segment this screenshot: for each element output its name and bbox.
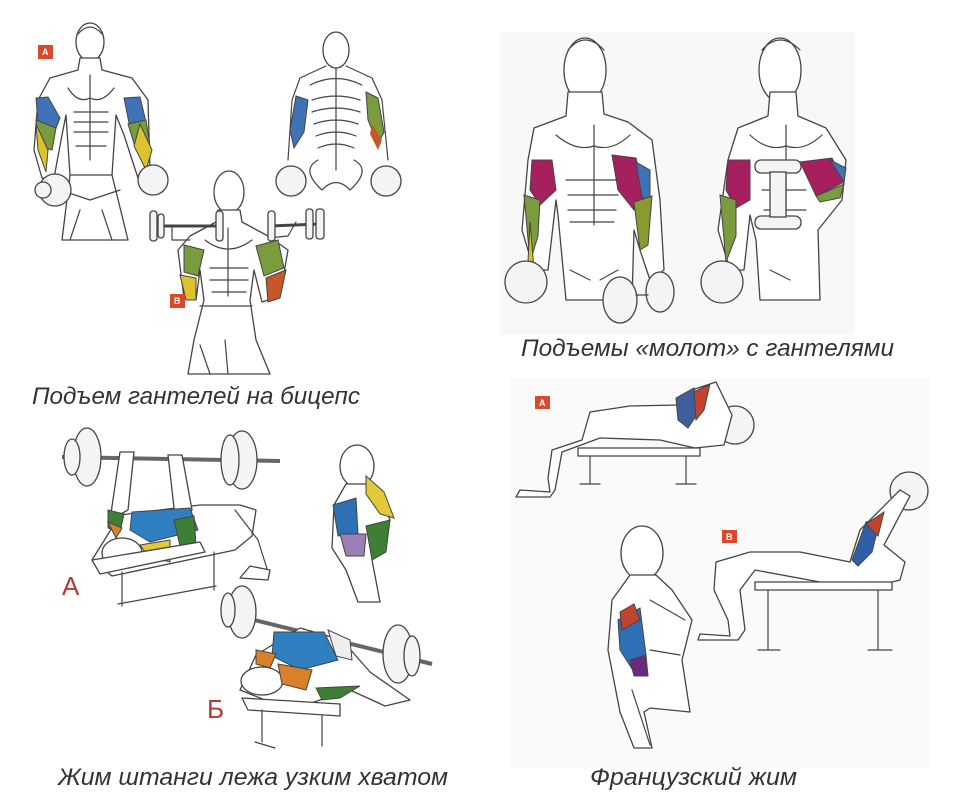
figure: right bbox=[701, 38, 846, 303]
dumbbell bbox=[603, 272, 674, 323]
label: B tag bbox=[170, 294, 185, 308]
caption: French press: Французский жим bbox=[590, 764, 797, 791]
figure: lying press A bbox=[92, 452, 270, 606]
barbell top bbox=[62, 428, 280, 489]
figure: curling dumbbells bbox=[150, 171, 324, 374]
panel: close-grip bench press bbox=[62, 428, 432, 748]
caption: hammer curls: Подъемы «молот» с гантелями bbox=[521, 335, 894, 362]
figure: lying A bbox=[516, 382, 754, 497]
caption: dumbbell curl: Подъем гантелей на бицепс bbox=[32, 383, 360, 410]
label: B tag bbox=[722, 530, 737, 543]
panel: dumbbell biceps curl bbox=[34, 23, 401, 374]
figure: lying press B bbox=[240, 628, 410, 748]
figure: lying B bbox=[698, 472, 928, 650]
left dumbbell bbox=[150, 211, 223, 241]
panel: French press bbox=[516, 382, 928, 748]
right dumbbell bbox=[268, 209, 324, 241]
panel: hammer curls background bbox=[500, 32, 855, 335]
figure: skeleton bbox=[276, 32, 401, 196]
figure: front standing bbox=[34, 23, 168, 240]
label: B tag: B bbox=[726, 532, 733, 542]
caption: bench press: Жим штанги лежа узким хватом bbox=[57, 764, 448, 791]
panel: hammer curls bbox=[505, 38, 846, 323]
label: B: Б bbox=[207, 694, 224, 724]
label: A tag: A bbox=[42, 47, 49, 57]
panel: French press background bbox=[510, 378, 930, 768]
dumbbell bbox=[755, 160, 801, 229]
label: B tag: B bbox=[174, 296, 181, 306]
label: A tag bbox=[535, 396, 550, 409]
label: A tag bbox=[38, 45, 53, 59]
label: A tag: A bbox=[539, 398, 546, 408]
figure: standing side bbox=[608, 526, 692, 748]
figure: torso side bbox=[332, 445, 394, 602]
label: A: А bbox=[62, 571, 80, 601]
barbell bottom bbox=[221, 586, 432, 683]
figure: left bbox=[505, 38, 674, 323]
